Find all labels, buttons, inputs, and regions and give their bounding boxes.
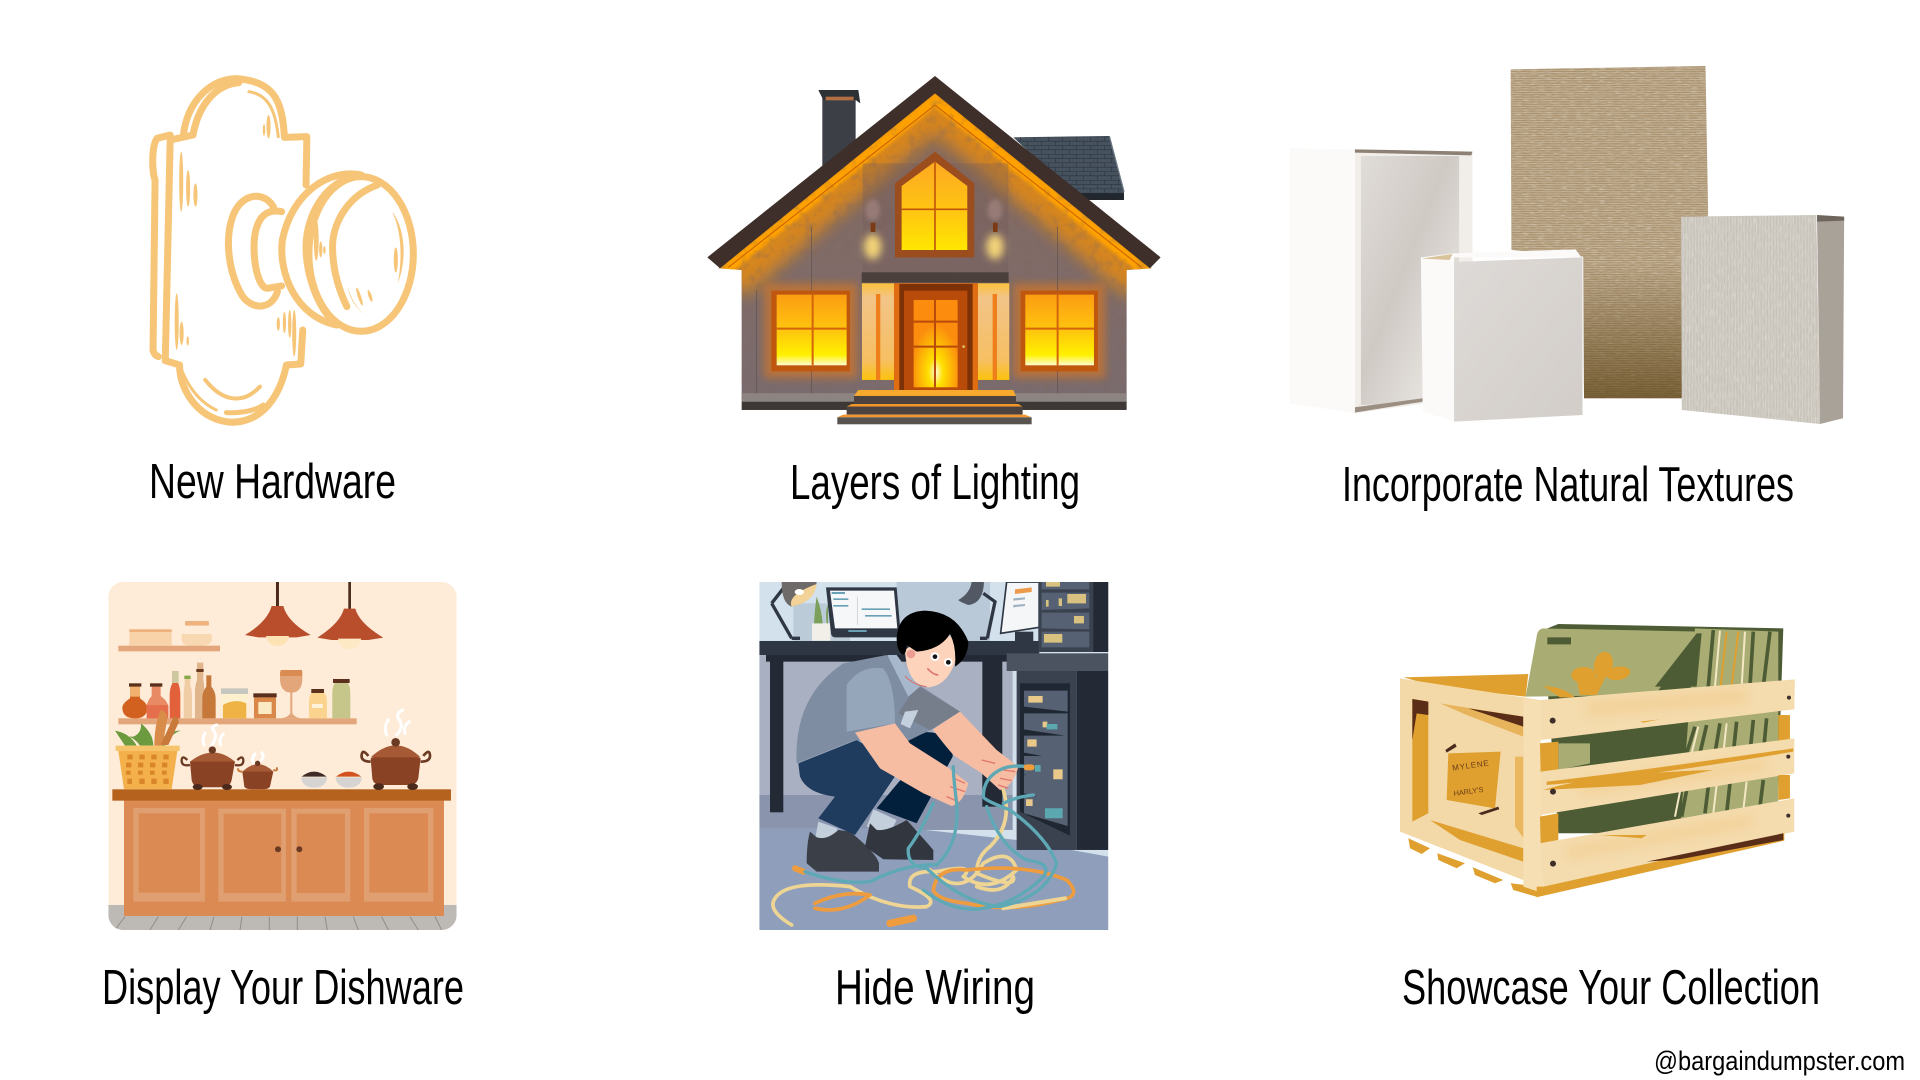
icon: man untangling cables <box>759 582 1108 930</box>
burlap panel <box>1507 63 1713 400</box>
head and hair <box>897 611 968 687</box>
bottles and jars <box>122 663 350 718</box>
panel: natural textures <box>1345 66 1844 511</box>
caption: Layers of Lighting: Layers of Lighting <box>790 456 1080 510</box>
bowls of food <box>301 772 362 788</box>
caption: Hide Wiring: Hide Wiring <box>835 961 1035 1015</box>
steam <box>203 710 409 763</box>
crate label text: MYLENE <box>1452 759 1489 773</box>
torso and sleeve <box>796 655 960 763</box>
caption: New Hardware: New Hardware <box>149 455 396 509</box>
room background <box>759 582 1108 930</box>
icon: textured boxes <box>1354 66 1844 424</box>
panel: layers of lighting <box>707 76 1161 510</box>
desk <box>759 641 1039 812</box>
laptop <box>826 587 901 637</box>
side roof <box>1013 136 1124 200</box>
cabinet <box>124 800 444 916</box>
panel: hide wiring <box>759 582 1108 1015</box>
shoes and socks <box>807 809 933 872</box>
arms and hands <box>855 712 1018 806</box>
panel: display your dishware <box>102 582 464 1015</box>
tall open white box <box>1290 148 1472 413</box>
gable window <box>895 152 974 257</box>
side lights <box>862 283 1009 380</box>
linen box <box>1679 213 1844 427</box>
server cabinet <box>1007 653 1108 850</box>
front steps <box>837 390 1032 424</box>
left window <box>771 291 850 371</box>
record sleeves <box>1526 624 1783 833</box>
icon: kitchen illustration <box>108 582 457 930</box>
trousers <box>798 732 953 835</box>
basket with bread and greens <box>115 710 181 789</box>
house walls <box>718 93 1152 410</box>
floor <box>108 905 457 930</box>
countertop <box>112 789 451 801</box>
crate side panel <box>1400 678 1540 887</box>
monitor <box>1001 582 1039 641</box>
crate side panel: HARLY'S <box>1453 785 1484 798</box>
small white box <box>1421 249 1582 422</box>
icon: glowing house <box>707 76 1161 424</box>
cooking pots <box>182 738 430 790</box>
caption: Display Your Dishware: Display Your Dishware <box>102 961 464 1015</box>
icon: record crate <box>1400 624 1795 897</box>
upper shelf containers <box>129 621 212 645</box>
flower motif <box>1543 650 1631 697</box>
icon: door knob <box>153 79 413 422</box>
pendant lamps <box>245 582 383 649</box>
front door <box>894 283 978 390</box>
crate feet <box>1408 838 1538 897</box>
main roof <box>707 76 1161 268</box>
upper equipment rack <box>1038 582 1108 652</box>
panel: showcase your collection <box>1400 624 1820 1015</box>
chimney <box>818 90 860 167</box>
panel: new hardware <box>149 79 413 509</box>
right window <box>1021 291 1098 371</box>
slat wash blotches <box>1567 689 1767 859</box>
crate inside rim <box>1403 674 1528 697</box>
desk lamps and plant <box>772 582 995 641</box>
tangled cables <box>773 766 1074 925</box>
front slats <box>1523 679 1795 897</box>
porch beam <box>862 272 1009 283</box>
shelves <box>118 646 357 724</box>
